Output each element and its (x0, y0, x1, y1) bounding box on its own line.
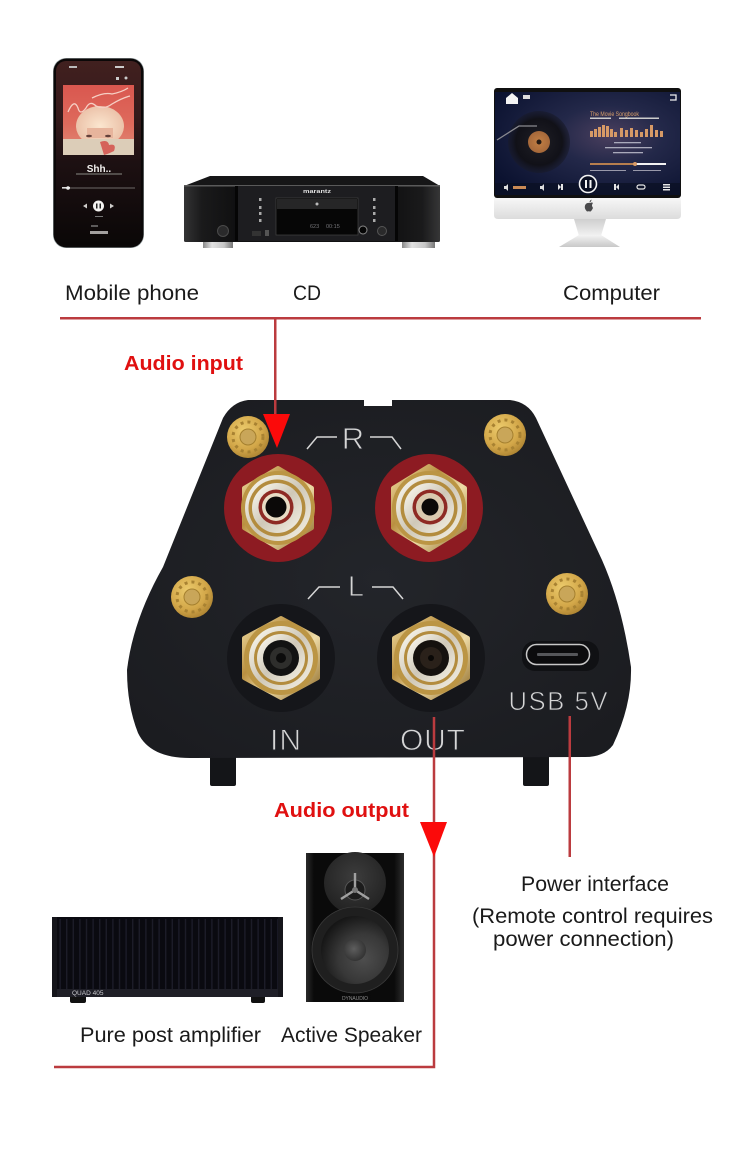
USB-C port (522, 641, 599, 671)
phone image (53, 58, 144, 248)
active speaker image: DYNAUDIO (342, 996, 368, 1002)
active speaker image (306, 852, 404, 1002)
foot left (210, 750, 236, 786)
note: remote control requires power: (Remote control requires (472, 905, 713, 928)
RCA jack: R in (224, 454, 332, 562)
computer image: The Movie Songbook (590, 111, 640, 118)
line: audio output (54, 717, 434, 1067)
RCA jack: R out (375, 454, 483, 562)
text: R: R (342, 421, 364, 456)
note: remote control requires power (472, 905, 713, 951)
computer image (494, 88, 681, 247)
power amplifier image: QUAD 405 (72, 990, 104, 997)
text: L: L (348, 571, 364, 603)
label: Power interface: Power interface (521, 873, 669, 896)
label: Computer: Computer (563, 282, 660, 305)
arrow: audio input (263, 414, 290, 448)
L bracket (308, 587, 403, 599)
RCA jack: L out (377, 604, 485, 712)
arrow: audio output (420, 822, 447, 857)
divider line: sources bus (60, 317, 701, 320)
CD player image: 623 (310, 224, 319, 230)
label: Active Speaker: Active Speaker (281, 1024, 422, 1047)
text: USB 5V: USB 5V (508, 688, 608, 716)
CD player image: 00:15 (326, 224, 340, 230)
screw top left (227, 416, 269, 458)
device body (127, 400, 631, 758)
phone image: Shh.. (87, 164, 111, 175)
screw right (546, 573, 588, 615)
RCA jack: L in (227, 604, 335, 712)
note: remote control requires power: power connection) (493, 928, 674, 951)
CD player image: marantz (303, 189, 332, 195)
CD player image (184, 176, 440, 248)
R bracket (307, 437, 401, 449)
foot right (523, 750, 549, 786)
label: Mobile phone: Mobile phone (65, 282, 199, 305)
line: power interface (568, 716, 571, 857)
label: Audio input: Audio input (124, 353, 243, 375)
device rear panel (127, 400, 631, 786)
screw left (171, 576, 213, 618)
label: Audio output: Audio output (274, 800, 409, 822)
label: CD: CD (293, 282, 321, 305)
text: IN: IN (270, 724, 301, 757)
screw top right (484, 414, 526, 456)
power amplifier image (52, 917, 283, 1003)
text: OUT: OUT (400, 724, 465, 757)
label: Pure post amplifier: Pure post amplifier (80, 1024, 261, 1047)
line: audio input (274, 319, 276, 415)
